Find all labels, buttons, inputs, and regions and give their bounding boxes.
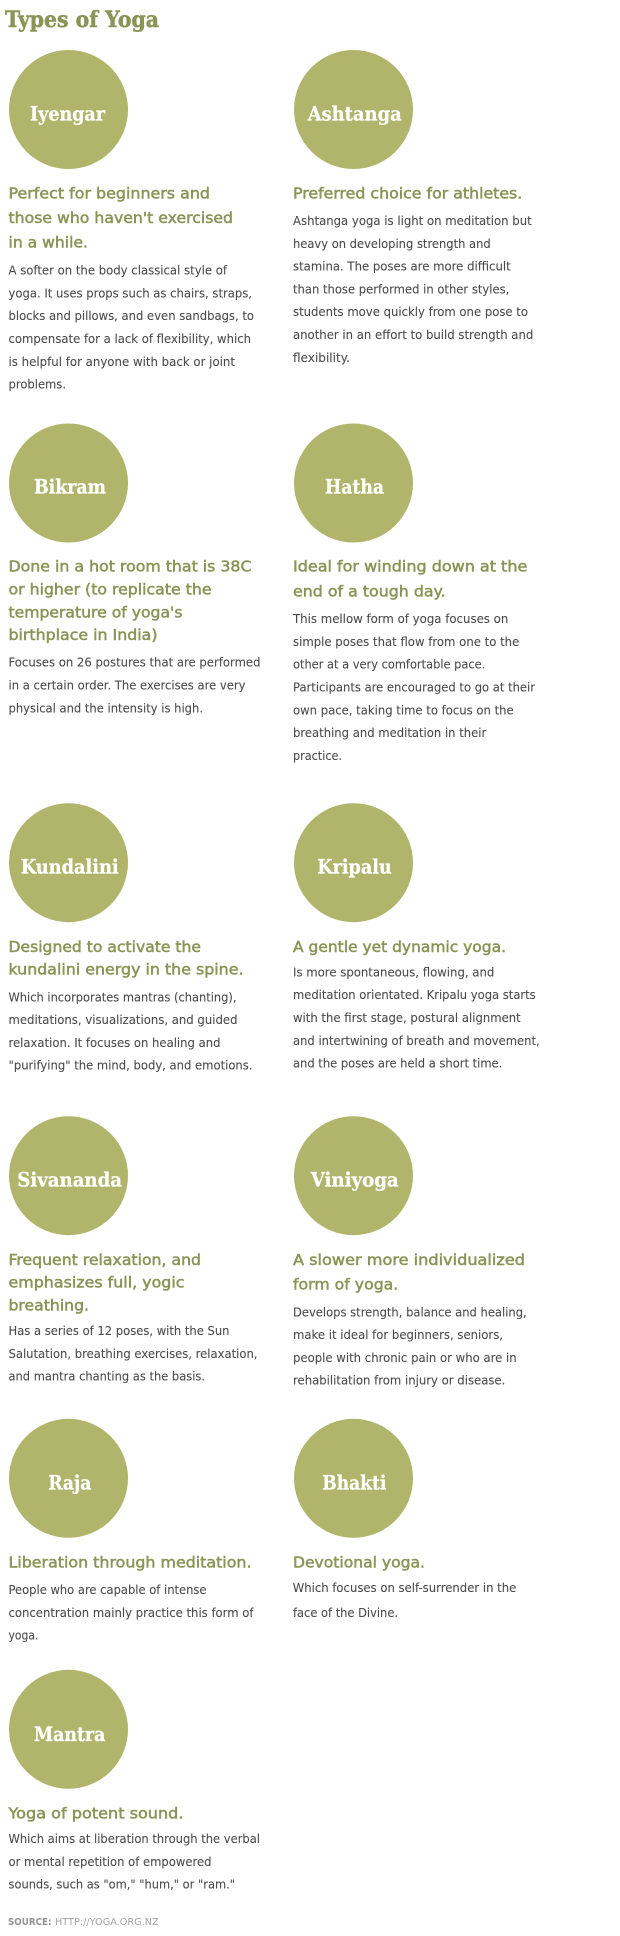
title: Types of Yoga [5,7,159,33]
text block: Iyengar description [8,264,254,392]
text block: Hatha description: other at a very comfortable pace. [293,658,485,672]
text block: Ashtanga description: heavy on developing strength and [293,237,491,251]
text block: Raja description: concentration mainly practice this form of [8,1606,254,1620]
panel: Bhakti [293,1419,516,1620]
text block: Viniyoga description: Develops strength, balance and healing, [293,1305,527,1319]
text block: Bikram description: physical and the intensity is high. [8,701,203,715]
text block: Mantra description [8,1832,260,1892]
icon: Kripalu circle badge: Kripalu [317,854,392,878]
icon: Bikram circle badge: Bikram [34,474,106,498]
text block: Viniyoga description: rehabilitation from injury or disease. [293,1374,505,1388]
icon: Mantra circle badge: Mantra [34,1722,105,1746]
text block: Bikram description: in a certain order. The exercises are very [8,679,246,693]
panel: Sivananda [8,1116,258,1384]
heading: Kundalini: Designed to activate the [8,938,201,956]
heading: Sivananda: emphasizes full, yogic [8,1274,184,1292]
text block: Hatha description: Participants are encouraged to go at their [293,681,535,695]
text block: Bhakti description: Which focuses on self-surrender in the [293,1581,516,1595]
panel: Kripalu [293,803,540,1071]
text block: Raja description [8,1583,254,1643]
icon: Mantra circle badge [9,1670,128,1789]
text block: Hatha description: simple poses that flow from one to the [293,635,519,649]
icon: Viniyoga circle badge [294,1116,413,1235]
text block: Ashtanga description: students move quickly from one pose to [293,305,528,319]
icon: Hatha circle badge [294,424,413,542]
text block: Iyengar description: is helpful for anyone with back or joint [8,355,235,369]
heading: Raja: Liberation through meditation. [8,1554,252,1572]
text block: Kripalu description: meditation orientated. Kripalu yoga starts [293,988,536,1002]
heading: Iyengar: in a while. [8,234,88,252]
text block: Ashtanga description: than those performed in other styles, [293,282,509,296]
text block: Mantra description: or mental repetition of empowered [8,1855,212,1869]
text block: Bikram description [8,656,260,715]
heading: Bikram: Done in a hot room that is 38C [8,558,252,576]
text block: Viniyoga description [293,1305,527,1388]
icon: Bikram circle badge [9,424,128,542]
heading: Kripalu: A gentle yet dynamic yoga. [293,938,506,956]
text block: Hatha description: This mellow form of yoga focuses on [292,612,508,626]
text block: Raja description: yoga. [8,1629,38,1643]
icon: Hatha circle badge: Hatha [325,474,384,498]
icon: Kundalini circle badge [9,803,128,922]
text block: Sivananda description: and mantra chanting as the basis. [8,1370,205,1384]
heading: Sivananda: Frequent relaxation, and [8,1251,201,1269]
text block: Iyengar description: compensate for a lack of flexibility, which [8,332,251,346]
icon: Raja circle badge: Raja [48,1471,91,1495]
heading: Bikram: temperature of yoga's [8,603,182,621]
text block: Ashtanga description: stamina. The poses are more difficult [293,260,511,274]
heading: Sivananda [8,1251,201,1314]
source credit: SOURCE: [8,1917,52,1928]
heading: Hatha [293,558,527,600]
text block: Ashtanga description: another in an effort to build strength and [293,328,533,342]
text block: Kripalu description [293,965,540,1071]
text block: Mantra description: Which aims at liberation through the verbal [8,1832,260,1846]
text block: Kripalu description: with the first stage, postural alignment [293,1011,521,1025]
icon: Sivananda circle badge: Sivananda [17,1168,122,1192]
heading: Bikram [8,558,252,644]
icon: Sivananda circle badge [9,1116,128,1235]
text block: Iyengar description: blocks and pillows, and even sandbags, to [8,309,254,323]
heading: Sivananda: breathing. [8,1296,89,1314]
heading: Kundalini [8,938,244,979]
panel: Mantra [7,1670,260,1892]
text block: Raja description: People who are capable of intense [8,1583,206,1597]
panel: Kundalini [8,803,252,1073]
text block: Kundalini description: Which incorporates mantras (chanting), [8,990,236,1004]
heading: Viniyoga [293,1251,525,1294]
text block: Kundalini description: "purifying" the mind, body, and emotions. [8,1059,252,1073]
text block: Kundalini description: relaxation. It focuses on healing and [8,1036,220,1050]
heading: Bikram: or higher (to replicate the [8,580,212,598]
text block: Ashtanga description [293,214,533,365]
icon: Iyengar circle badge [9,50,128,169]
text block: Kripalu description: and the poses are held a short time. [293,1057,502,1071]
heading: Viniyoga: form of yoga. [293,1276,398,1294]
text block: Sivananda description: Has a series of 12 poses, with the Sun [8,1324,230,1338]
icon: Ashtanga circle badge: Ashtanga [307,102,402,126]
heading: Iyengar: Perfect for beginners and [8,184,210,202]
text block: Iyengar description: A softer on the body classical style of [8,264,228,278]
text block: Sivananda description [8,1324,258,1384]
text block: Kripalu description: and intertwining of breath and movement, [293,1034,540,1048]
text block: Viniyoga description: make it ideal for beginners, seniors, [293,1328,503,1342]
text block: Viniyoga description: people with chronic pain or who are in [293,1351,517,1365]
heading: Iyengar [8,184,233,252]
source credit [8,1917,159,1928]
text block: Iyengar description: problems. [8,378,66,392]
text block: Ashtanga description: flexibility. [293,351,350,365]
heading: Iyengar: those who haven't exercised [8,209,233,227]
text block: Iyengar description: yoga. It uses props such as chairs, straps, [8,286,252,300]
panel: Viniyoga [293,1116,527,1388]
icon: Viniyoga circle badge: Viniyoga [310,1168,399,1192]
icon: Raja circle badge [9,1419,128,1538]
icon: Bhakti circle badge: Bhakti [322,1471,387,1495]
heading: Hatha: Ideal for winding down at the [293,558,527,576]
text block: Kripalu description: Is more spontaneous, flowing, and [293,965,494,979]
icon: Kripalu circle badge [294,803,413,922]
heading: Bhakti: Devotional yoga. [293,1554,425,1572]
text block: Bikram description: Focuses on 26 postures that are performed [8,656,260,670]
text block: Kundalini description [8,990,252,1073]
text block: Hatha description [292,612,535,763]
panel: Ashtanga [293,50,533,365]
icon: Iyengar circle badge: Iyengar [30,102,105,126]
panel: Hatha [292,424,535,763]
text block: Bhakti description [293,1581,516,1620]
text block: Sivananda description: Salutation, breathing exercises, relaxation, [8,1347,258,1361]
text block: Bhakti description: face of the Divine. [293,1606,398,1620]
text block: Kundalini description: meditations, visualizations, and guided [8,1013,238,1027]
panel: Raja [8,1419,254,1643]
icon: Kundalini circle badge: Kundalini [21,854,119,878]
heading: Ashtanga: Preferred choice for athletes. [293,184,522,202]
text block: Mantra description: sounds, such as "om," "hum," or "ram." [8,1878,235,1892]
heading: Hatha: end of a tough day. [293,582,446,600]
heading: Mantra: Yoga of potent sound. [7,1805,184,1823]
icon: Ashtanga circle badge [294,50,413,169]
heading: Viniyoga: A slower more individualized [293,1251,525,1269]
text block: Hatha description: practice. [293,749,342,763]
text block: Ashtanga description: Ashtanga yoga is light on meditation but [293,214,532,228]
text block: Hatha description: breathing and meditation in their [293,726,486,740]
text block: Hatha description: own pace, taking time to focus on the [293,703,514,717]
source credit: HTTP://YOGA.ORG.NZ [55,1917,159,1928]
icon: Bhakti circle badge [294,1419,413,1538]
heading: Kundalini: kundalini energy in the spine. [8,961,244,979]
panel: Iyengar [8,50,254,392]
panel: Bikram [8,424,260,715]
heading: Bikram: birthplace in India) [8,626,158,644]
